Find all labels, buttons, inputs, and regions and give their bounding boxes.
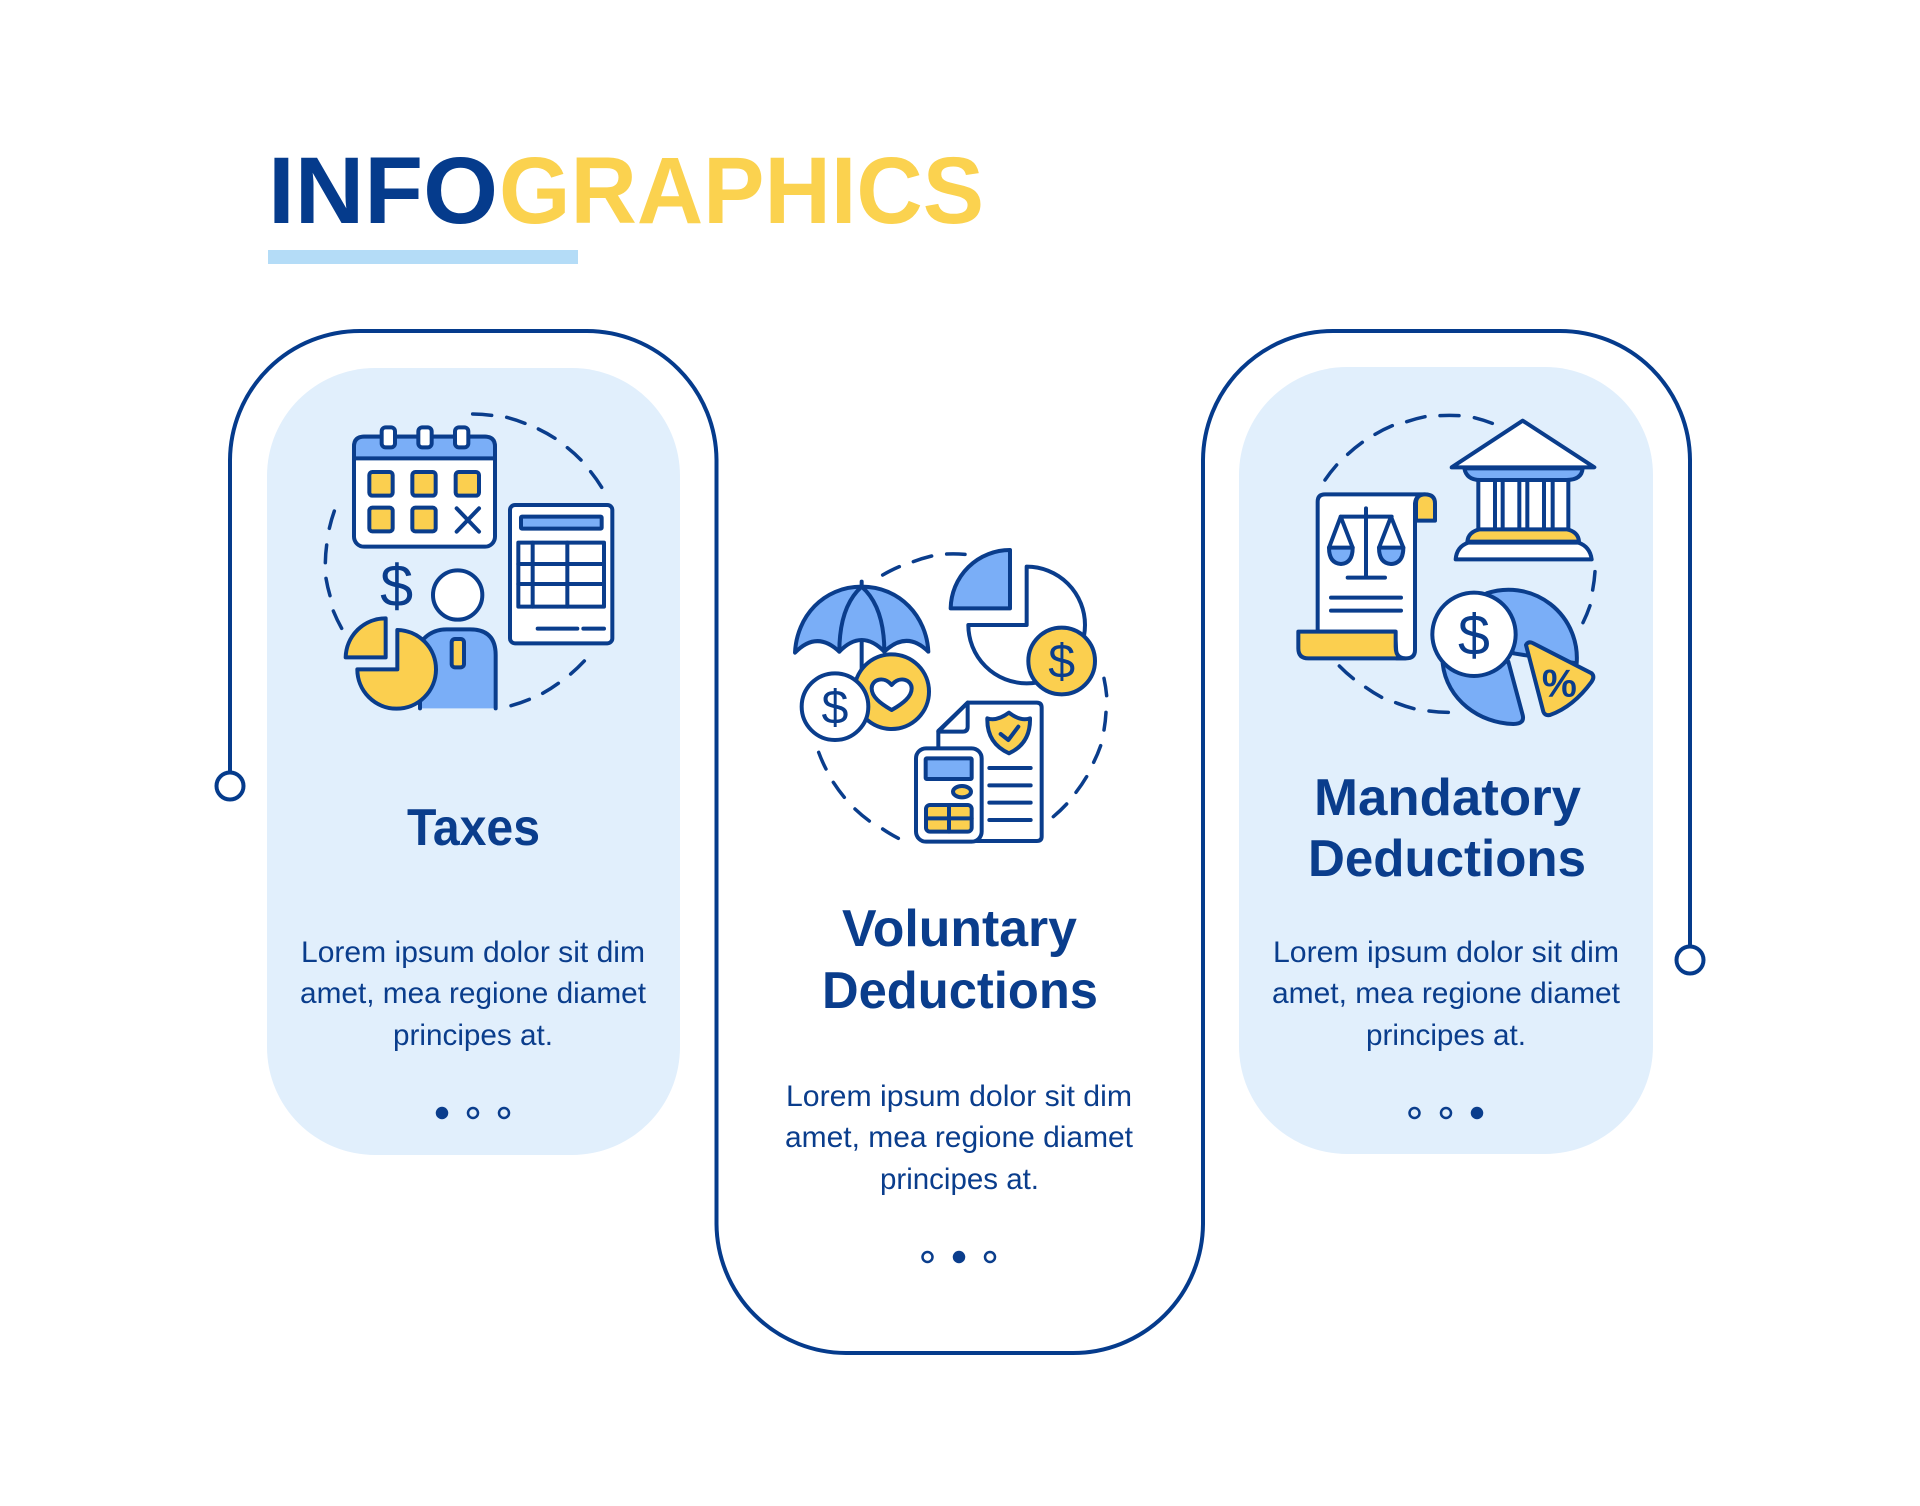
pie chart	[951, 550, 1085, 683]
left frame end circle	[216, 772, 244, 800]
yellow dollar coin	[1028, 628, 1095, 694]
tax form table	[510, 505, 612, 643]
heading: mandatory deductions	[1308, 769, 1586, 888]
body text: taxes	[300, 936, 647, 1052]
pie chart: %	[1542, 662, 1577, 706]
connector frame outline	[216, 331, 1704, 1353]
body text: voluntary deductions	[785, 1080, 1134, 1196]
title: INFO	[268, 138, 498, 244]
insurance document	[938, 703, 1042, 841]
heading: voluntary deductions: Voluntary	[842, 900, 1077, 958]
pagination dots: mandatory deductions	[1410, 1108, 1482, 1118]
body text: mandatory deductions: amet, mea regione diamet	[1272, 977, 1621, 1010]
title	[268, 138, 984, 244]
body text: mandatory deductions: principes at.	[1366, 1019, 1526, 1052]
dollar coin	[802, 673, 868, 740]
body text: mandatory deductions: Lorem ipsum dolor sit dim	[1273, 936, 1619, 969]
right frame end circle	[1676, 946, 1704, 974]
heading: voluntary deductions: Deductions	[822, 962, 1098, 1020]
dollar coin: $	[822, 680, 849, 734]
icon: taxes	[325, 414, 612, 709]
pagination dots: voluntary deductions	[922, 1252, 995, 1262]
title underline	[268, 250, 578, 264]
dashed circle	[325, 414, 602, 706]
dashed circle	[819, 554, 1107, 838]
bank building	[1452, 421, 1594, 559]
panel: taxes background	[267, 368, 680, 1155]
title: GRAPHICS	[499, 138, 984, 244]
heading: mandatory deductions: Mandatory	[1314, 769, 1581, 827]
body text: voluntary deductions: Lorem ipsum dolor sit dim	[786, 1080, 1132, 1113]
dollar coin: $	[1458, 603, 1490, 667]
calculator	[916, 748, 982, 842]
dollar coin	[1432, 593, 1516, 676]
umbrella	[795, 582, 928, 670]
pagination dots: taxes	[437, 1108, 509, 1118]
pie chart	[1443, 590, 1593, 724]
person	[420, 570, 496, 708]
calendar	[354, 427, 495, 547]
body text: voluntary deductions: principes at.	[880, 1163, 1039, 1196]
body text: taxes: amet, mea regione diamet	[300, 977, 647, 1010]
body text: taxes: principes at.	[393, 1019, 553, 1052]
body text: taxes: Lorem ipsum dolor sit dim	[301, 936, 645, 969]
heading: taxes: Taxes	[407, 799, 540, 857]
dashed circle	[1325, 415, 1595, 712]
icon: mandatory deductions	[1298, 415, 1595, 724]
legal scroll with scales	[1298, 494, 1435, 658]
heading: voluntary deductions	[822, 900, 1098, 1020]
heart coin	[854, 654, 929, 729]
body text: voluntary deductions: amet, mea regione diamet	[785, 1121, 1134, 1154]
dollar sign: $	[380, 552, 413, 619]
panel: mandatory deductions background	[1239, 367, 1653, 1154]
body text: mandatory deductions	[1272, 936, 1621, 1052]
yellow dollar coin: $	[1048, 635, 1075, 689]
pie chart	[346, 618, 436, 709]
icon: voluntary deductions	[795, 550, 1107, 842]
heading: mandatory deductions: Deductions	[1308, 830, 1586, 888]
